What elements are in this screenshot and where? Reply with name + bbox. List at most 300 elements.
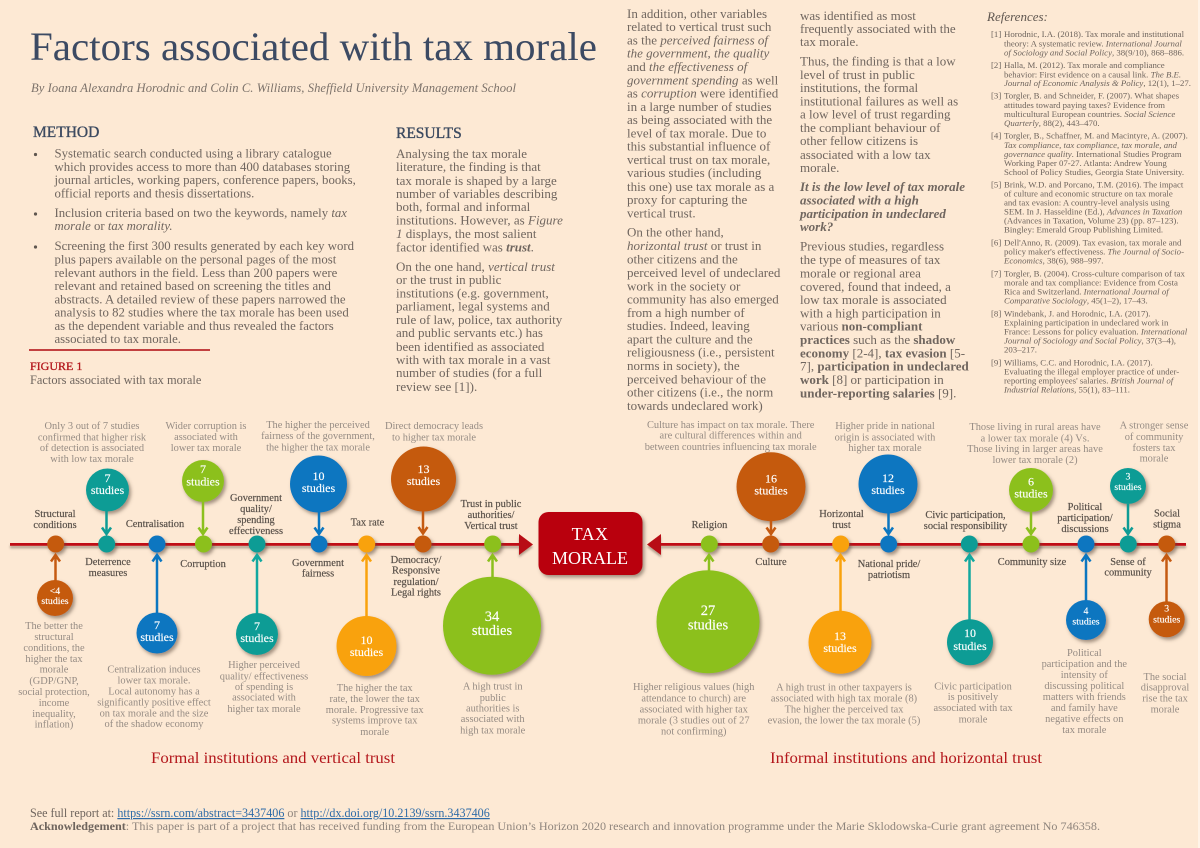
factor: structural conditions: conditions, the bbox=[23, 643, 85, 654]
reference numbers: [5] bbox=[991, 180, 1001, 190]
method text: relevant and retained based on screening the titles and bbox=[54, 279, 332, 293]
factor: national pride: National pride/ bbox=[858, 559, 920, 570]
results text column 3: frequently associated with the bbox=[800, 21, 956, 36]
factor: deterrence measures: studies bbox=[91, 483, 124, 497]
method text: Screening the first 300 results generated by each key word bbox=[54, 239, 355, 253]
factor: structural conditions: inequality, bbox=[32, 709, 76, 720]
method text: analysis to 82 studies where the tax morale has been used bbox=[54, 306, 349, 320]
factor: trust in public authorities: public bbox=[480, 693, 506, 704]
central box: tax morale: MORALE bbox=[552, 548, 628, 568]
results text column 2: related to vertical trust such bbox=[627, 19, 772, 34]
panel: results bbox=[396, 6, 972, 413]
results text column 3: under-reporting salaries [9]. bbox=[800, 386, 956, 400]
factor: trust in public authorities: A high trust in bbox=[463, 682, 523, 692]
figure caption bbox=[29, 349, 210, 387]
reference list: France: Lessons for policy evaluation. International bbox=[1004, 326, 1187, 336]
factor: corruption bbox=[166, 421, 246, 570]
results text column 2: On the other hand, bbox=[627, 224, 724, 240]
factor: horizontal trust: The higher the perceived tax bbox=[785, 704, 904, 716]
reference list: attitudes toward paying taxes? Evidence from bbox=[1004, 100, 1165, 110]
factor: deterrence measures: Deterrence bbox=[85, 557, 131, 568]
method text: plus papers available on the personal pages of the most bbox=[54, 252, 337, 266]
factor: structural conditions: inflation) bbox=[35, 720, 73, 730]
figure caption: FIGURE 1 bbox=[30, 359, 82, 373]
arrow: left timeline into tax morale bbox=[10, 534, 533, 555]
heading: results: RESULTS bbox=[396, 125, 462, 142]
results text column 3: 7], participation in undeclared bbox=[800, 358, 969, 374]
factor: democracy bbox=[385, 421, 483, 598]
factor: trust in public authorities: Vertical trust bbox=[464, 521, 518, 532]
factor: culture: Culture bbox=[755, 557, 787, 568]
reference list: Brink, W.D. and Porcano, T.M. (2016). The impact bbox=[1004, 180, 1184, 190]
results text column 3: a low level of trust regarding bbox=[800, 106, 951, 122]
reference numbers: [1] bbox=[991, 29, 1001, 39]
factor: social stigma: morale bbox=[1151, 704, 1180, 716]
factor: centralisation: 7 bbox=[154, 618, 160, 632]
reference list: Horodnic, I.A. (2018). Tax morale and institutional bbox=[1004, 29, 1185, 39]
factor: community size: Those living in larger areas have bbox=[967, 444, 1103, 455]
factor: corruption: studies bbox=[186, 474, 220, 488]
results text column 3: associated with a low tax bbox=[800, 147, 931, 162]
results text column 2: proxy for capturing the bbox=[627, 192, 747, 207]
results text column 3: morale or regional area bbox=[800, 266, 921, 280]
results text column 3: level of trust in public bbox=[800, 67, 915, 82]
results text column 1: 1 displays, the most salient bbox=[396, 226, 536, 241]
factor: centralisation bbox=[97, 519, 211, 730]
reference list: Torgler, B. (2004). Cross-culture comparison of tax bbox=[1004, 269, 1185, 279]
factor: democracy: studies bbox=[407, 474, 440, 488]
factor: deterrence measures: of detection is associated bbox=[40, 443, 145, 454]
factor: government fairness: the higher the tax morale bbox=[266, 442, 370, 454]
factor: social stigma: stigma bbox=[1153, 520, 1181, 530]
factor: horizontal trust: A high trust in other taxpayers is bbox=[776, 682, 912, 694]
results text column 2: perceived level of undeclared bbox=[627, 265, 781, 280]
results text column 3: the compliant behaviour of bbox=[800, 120, 941, 135]
results text column 3: practices such as the shadow bbox=[800, 332, 955, 347]
factor: religion: Religion bbox=[692, 520, 728, 531]
factor: centralisation: of the shadow economy bbox=[105, 719, 204, 730]
factor: horizontal trust: associated with high tax morale (8) bbox=[771, 694, 917, 704]
heading: method: METHOD bbox=[33, 124, 99, 141]
results text column 2: religiousness (i.e., persistent bbox=[627, 344, 775, 360]
reference list: Industrial Relations, 55(1), 83–111. bbox=[1004, 384, 1130, 394]
factor: political participation: discussions bbox=[1061, 524, 1109, 535]
results text column 2: In addition, other variables bbox=[627, 6, 767, 21]
section heading: formal institutions: Formal institutions and vertical trust bbox=[151, 750, 396, 767]
results text column 2: studies. Indeed, leaving bbox=[627, 318, 750, 333]
factor: political participation bbox=[1042, 502, 1127, 736]
factor: trust in public authorities: 34 bbox=[485, 609, 500, 625]
results text column 1: review see [1]). bbox=[396, 379, 477, 394]
reference list: Halla, M. (2012). Tax morale and compliance bbox=[1004, 60, 1165, 70]
results text column 2: horizontal trust or trust in bbox=[627, 238, 761, 253]
results text column 2: norms in society), the bbox=[627, 358, 740, 373]
factor: tax rate bbox=[326, 518, 424, 738]
factor: tax rate: 10 bbox=[360, 633, 372, 647]
factor: government quality: effectiveness bbox=[229, 526, 283, 537]
factor: community size: Community size bbox=[998, 557, 1067, 568]
heading: references: References: bbox=[986, 9, 1048, 24]
factor: deterrence measures: with low tax morale bbox=[50, 454, 134, 465]
factor: social stigma: 3 bbox=[1164, 604, 1169, 614]
factor: structural conditions: social protection, bbox=[18, 687, 90, 698]
reference numbers: [4] bbox=[991, 131, 1001, 141]
factor: government fairness bbox=[261, 420, 375, 580]
factor: civic participation: morale bbox=[959, 714, 988, 726]
results text column 2: from a high number of bbox=[627, 305, 745, 320]
factor: structural conditions: studies bbox=[41, 596, 69, 607]
factor: horizontal trust bbox=[768, 509, 920, 726]
results text column 2: vertical trust on tax morale, bbox=[627, 152, 770, 167]
results text column 2: other citizens and the bbox=[627, 252, 738, 266]
results text column 3: economy [2-4], tax evasion [5- bbox=[800, 346, 965, 360]
factor: tax rate: Tax rate bbox=[351, 518, 385, 528]
results text column 3: work? bbox=[800, 219, 834, 234]
reference list: Rica and Switzerland. International Journal of bbox=[1004, 287, 1169, 297]
results text column 2: level of tax morale. Due to bbox=[627, 126, 766, 140]
reference list: Comparative Sociology, 45(1–2), 17–43. bbox=[1004, 296, 1148, 306]
reference list: Windebank, J. and Horodnic, I.A. (2017). bbox=[1004, 308, 1150, 318]
factor: political participation: 4 bbox=[1084, 606, 1089, 617]
factor: centralisation: Centralization induces bbox=[107, 664, 201, 676]
results text column 2: in a large number of studies bbox=[627, 99, 772, 114]
factor: centralisation: Local autonomy has a bbox=[108, 686, 200, 698]
results text column 1: number of variables describing bbox=[396, 186, 558, 201]
reference list: reporting employees' salaries. British Journal of bbox=[1004, 375, 1173, 385]
reference list: SEM. In J. Hasseldine (Ed.), Advances in Taxation bbox=[1004, 207, 1182, 217]
method text: which provides access to more than 400 databases storing bbox=[54, 160, 351, 174]
factor: political participation: studies bbox=[1072, 616, 1100, 628]
central box: tax morale: TAX bbox=[572, 524, 608, 544]
results text column 3: associated with a high bbox=[800, 192, 919, 208]
factor: sense of community: 3 bbox=[1126, 472, 1131, 482]
factor: structural conditions: conditions bbox=[33, 520, 77, 531]
factor: national pride bbox=[835, 421, 936, 581]
factor: democracy: 13 bbox=[418, 462, 430, 476]
title: Factors associated with tax morale bbox=[30, 24, 597, 69]
factor: tax rate: studies bbox=[350, 645, 383, 659]
factor: sense of community: A stronger sense bbox=[1120, 420, 1189, 432]
reference list: and tax evasion: A country-level analysis using bbox=[1004, 198, 1170, 208]
factor: civic participation: is positively bbox=[948, 692, 999, 703]
factor: horizontal trust: Horizontal bbox=[819, 509, 864, 520]
results text column 2: the government, the quality bbox=[627, 46, 769, 60]
factor: trust in public authorities: Trust in public bbox=[461, 499, 522, 510]
factor: government quality: Government bbox=[230, 493, 282, 504]
results text column 2: as corruption were identified bbox=[627, 86, 778, 100]
factor: structural conditions: <4 bbox=[50, 586, 60, 597]
factor: community size: 6 bbox=[1028, 474, 1034, 488]
factor: corruption: 7 bbox=[200, 462, 206, 476]
factor: government quality: spending bbox=[237, 515, 275, 526]
factor: civic participation: associated with tax bbox=[933, 703, 1013, 714]
factor: deterrence measures bbox=[38, 421, 147, 579]
footer: report links and acknowledgement bbox=[30, 806, 1100, 833]
factor: culture: Culture has impact on tax morale. There bbox=[647, 420, 815, 431]
factor: horizontal trust: trust bbox=[832, 520, 851, 531]
reference list: morale and tax compliance: Evidence from Costa bbox=[1004, 278, 1178, 288]
reference list: Journal of Sociology and Social Policy, 37(3–4), bbox=[1004, 335, 1176, 345]
factor: democracy: Responsive bbox=[392, 566, 440, 576]
results text column 1: both, formal and informal bbox=[396, 199, 531, 214]
factor: political participation: discussing political bbox=[1044, 681, 1124, 692]
results text column 2: this one) use tax morale as a bbox=[627, 179, 775, 194]
results text column 2: this substantial influence of bbox=[627, 138, 771, 154]
factor: centralisation: on tax morale and the size bbox=[100, 708, 209, 720]
factor: trust in public authorities: authorities/ bbox=[468, 510, 514, 521]
factor: structural conditions: Structural bbox=[35, 509, 76, 520]
factor: government fairness: studies bbox=[302, 481, 335, 495]
factor: political participation: negative effects on bbox=[1045, 714, 1124, 725]
factor: trust in public authorities: associated with bbox=[461, 714, 525, 725]
reference list: behavior: First evidence on a causal link. The B.E. bbox=[1004, 69, 1181, 79]
figure caption: Factors associated with tax morale bbox=[30, 373, 202, 387]
method text: associated to tax morale. bbox=[54, 332, 181, 346]
method text: as the dependent variable and thus revealed the factors bbox=[54, 319, 334, 333]
factor: centralisation: lower tax morale. bbox=[118, 676, 190, 686]
results text column 2: and the effectiveness of bbox=[627, 59, 747, 74]
factor: religion: Higher religious values (high bbox=[633, 682, 755, 693]
reference list: theory: A systematic review. International Journal bbox=[1004, 38, 1182, 48]
factor: social stigma: The social bbox=[1144, 672, 1187, 683]
reference list: (Advances in Taxation, Volume 23) (pp. 87–123). bbox=[1004, 216, 1179, 226]
factor: trust in public authorities: high tax morale bbox=[460, 726, 526, 736]
factor: social stigma: disapproval bbox=[1141, 682, 1189, 694]
factor: government fairness: The higher the perceived bbox=[266, 420, 371, 431]
reference numbers: [8] bbox=[991, 308, 1001, 318]
factor: horizontal trust: 13 bbox=[834, 629, 846, 643]
factor: religion: attendance to church) are bbox=[641, 694, 746, 704]
reference list: School of Policy Studies, Georgia State University. bbox=[1004, 167, 1184, 177]
results text column 3: participation in undeclared bbox=[799, 206, 946, 221]
results text column 1: tax morale is shaped by a large bbox=[396, 173, 557, 188]
factor: deterrence measures: measures bbox=[89, 568, 127, 579]
results text column 3: It is the low level of tax morale bbox=[799, 179, 965, 194]
factor: government quality: of spending is bbox=[235, 682, 293, 693]
results text column 3: tax morale. bbox=[800, 34, 858, 49]
factor: centralisation: Centralisation bbox=[126, 519, 185, 530]
factor: government quality: higher tax morale bbox=[227, 704, 301, 715]
factor: social stigma: studies bbox=[1153, 614, 1180, 626]
factor: deterrence measures: confirmed that higher risk bbox=[38, 432, 147, 444]
results text column 1: Analysing the tax morale bbox=[396, 146, 527, 161]
factor: government fairness: 10 bbox=[312, 469, 324, 483]
factor: structural conditions: morale bbox=[40, 664, 69, 676]
factor: social stigma bbox=[1141, 508, 1189, 716]
factor: religion: studies bbox=[688, 618, 728, 634]
results text column 3: various non-compliant bbox=[800, 318, 922, 334]
reference list: policy maker's effectiveness. The Journal of Socio- bbox=[1004, 247, 1184, 257]
factor: religion: associated with higher tax bbox=[640, 704, 749, 716]
results text column 2: apart the culture and the bbox=[627, 332, 753, 346]
factor: government fairness: fairness bbox=[302, 568, 334, 580]
reference numbers: [2] bbox=[991, 60, 1001, 70]
results text column 3: was identified as most bbox=[800, 8, 916, 23]
reference list: Working Paper 07-27. Atlanta: Andrew Young bbox=[1004, 158, 1167, 168]
results text column 3: covered, found that indeed, a bbox=[800, 279, 951, 294]
factor: corruption: Wider corruption is bbox=[166, 421, 246, 432]
factor: civic participation: Civic participation bbox=[934, 682, 1013, 692]
factor: government fairness: fairness of the government, bbox=[261, 431, 375, 442]
factor: political participation: Political bbox=[1067, 648, 1102, 659]
reference list: Economics, 38(6), 988–997. bbox=[1004, 256, 1103, 266]
reference list: governance quality. International Studies Program bbox=[1004, 149, 1182, 159]
results text column 3: the type of measures of tax bbox=[800, 252, 941, 267]
factor: political participation: Political bbox=[1068, 502, 1102, 513]
factor: national pride: Higher pride in national bbox=[835, 421, 935, 432]
reference list: of Sociology and Social Policy, 38(9/10), 868–886. bbox=[1004, 47, 1184, 57]
factor: sense of community: studies bbox=[1114, 482, 1142, 493]
factor: community size: a lower tax morale (4) Vs. bbox=[981, 434, 1089, 444]
factor: culture: are cultural differences within and bbox=[660, 430, 803, 442]
reference numbers: [3] bbox=[991, 91, 1001, 101]
factor: government quality: associated with bbox=[232, 692, 297, 704]
factor: government fairness: Government bbox=[292, 558, 344, 569]
factor: sense of community: fosters tax bbox=[1132, 443, 1176, 454]
reference list: Williams, C.C. and Horodnic, I.A. (2017). bbox=[1004, 357, 1153, 367]
factor: sense of community: of community bbox=[1125, 432, 1184, 443]
results text column 1: institutions (e.g. government, bbox=[396, 286, 549, 300]
factor: social stigma: Social bbox=[1154, 508, 1180, 520]
results text column 2: community has also emerged bbox=[627, 292, 779, 306]
arrow: right timeline into tax morale bbox=[647, 534, 1186, 555]
panel: references bbox=[986, 9, 1193, 394]
factor: national pride: patriotism bbox=[868, 570, 910, 581]
factor: structural conditions: higher the tax bbox=[25, 654, 83, 665]
results text column 2: towards undeclared work) bbox=[627, 398, 763, 413]
results text column 1: institutions. However, as Figure bbox=[396, 212, 563, 228]
factor: community size bbox=[967, 422, 1103, 568]
results text column 3: morale. bbox=[800, 160, 839, 175]
factor: religion bbox=[633, 520, 760, 738]
factor: political participation: participation/ bbox=[1057, 513, 1113, 524]
section heading: informal institutions: Informal institutions and horizontal trust bbox=[770, 750, 1043, 767]
results text column 1: factor identified was trust. bbox=[396, 240, 534, 254]
factor: religion: 27 bbox=[701, 603, 715, 619]
factor: political participation: and family have bbox=[1051, 703, 1118, 714]
factor: corruption: Corruption bbox=[180, 559, 227, 570]
reference list: Bingley: Emerald Group Publishing Limited. bbox=[1004, 225, 1163, 235]
factor: political participation: matters with friends bbox=[1043, 692, 1126, 703]
reference list: Evaluating the illegal employer practice of under- bbox=[1004, 366, 1179, 376]
factor: culture: studies bbox=[754, 484, 788, 498]
factor: government quality: quality/ bbox=[240, 504, 272, 515]
factor: democracy: regulation/ bbox=[393, 577, 439, 588]
results text column 3: low tax morale is associated bbox=[800, 292, 947, 307]
factor: trust in public authorities bbox=[443, 499, 541, 736]
factor: sense of community: morale bbox=[1140, 454, 1169, 464]
results text column 3: work [8] or participation in bbox=[800, 372, 944, 387]
method text: Systematic search conducted using a library catalogue bbox=[54, 146, 332, 160]
results text column 3: institutional failures as well as bbox=[800, 94, 958, 108]
factor: religion: morale (3 studies out of 27 bbox=[638, 716, 750, 726]
method text: Inclusion criteria based on two the keywords, namely tax bbox=[54, 206, 347, 220]
factor: religion: not confirming) bbox=[661, 726, 726, 738]
factor: culture: between countries influencing tax morale bbox=[645, 442, 817, 453]
factor: tax rate: The higher the tax bbox=[337, 683, 413, 694]
factor: tax rate: rate, the lower the tax bbox=[330, 694, 421, 705]
factor: horizontal trust: evasion, the lower the tax morale (5) bbox=[768, 716, 920, 726]
factor: national pride: higher tax morale bbox=[848, 443, 922, 454]
method text: morale or tax morality. bbox=[54, 219, 173, 233]
factor: culture bbox=[645, 420, 817, 568]
results text column 1: parliament, legal systems and bbox=[396, 298, 550, 314]
factor: deterrence measures: Only 3 out of 7 studies bbox=[45, 421, 139, 432]
reference list: Explaining participation in undeclared work in bbox=[1004, 317, 1169, 327]
results text column 3: institutions, the formal bbox=[800, 80, 918, 95]
factor: government quality: studies bbox=[240, 631, 274, 645]
reference numbers: [7] bbox=[991, 269, 1001, 279]
results text column 3: Previous studies, regardless bbox=[800, 238, 944, 254]
factor: centralisation: significantly positive effect bbox=[97, 698, 211, 708]
factor: democracy: Democracy/ bbox=[391, 555, 441, 566]
method text: relevant authors in the field. Less than 200 papers were bbox=[54, 266, 338, 280]
method text: journal articles, working papers, conference papers, books, bbox=[54, 173, 356, 187]
factor: trust in public authorities: studies bbox=[472, 623, 512, 639]
factor: social stigma: rise the tax bbox=[1142, 694, 1189, 704]
results text column 2: various studies (including bbox=[627, 165, 762, 180]
method text: abstracts. A detailed review of these papers narrowed the bbox=[54, 292, 346, 306]
factor: sense of community: Sense of bbox=[1110, 557, 1146, 568]
factor: political participation: participation and the bbox=[1042, 659, 1127, 670]
factor: structural conditions: The better the bbox=[25, 621, 83, 632]
factor: tax rate: systems improve tax bbox=[332, 716, 418, 726]
method text: official reports and thesis dissertations. bbox=[54, 186, 254, 200]
reference numbers: [6] bbox=[991, 238, 1001, 248]
reference numbers: [9] bbox=[991, 357, 1001, 367]
reference list: Quarterly, 88(2), 443–470. bbox=[1004, 118, 1100, 128]
factor: tax rate: morale. Progressive tax bbox=[326, 705, 424, 716]
factor: community size: studies bbox=[1014, 486, 1048, 500]
results text column 3: with a high participation in bbox=[800, 306, 941, 320]
factor: trust in public authorities: authorities is bbox=[466, 704, 519, 714]
factor: centralisation: studies bbox=[140, 630, 174, 644]
factor: sense of community: community bbox=[1104, 568, 1152, 578]
results text column 1: with with tax morale in a vast bbox=[396, 352, 551, 367]
results text column 1: rule of law, police, tax authority bbox=[396, 312, 563, 327]
footer: report links and acknowledgement: Acknowledgement : This paper is part of a project that has received funding from the European Union’s Horizon 2020 research and innovation programme under the Marie Sklodowska-Curie grant agreement No 746358. bbox=[30, 821, 1100, 833]
panel: method bbox=[33, 124, 359, 346]
factor: democracy: Legal rights bbox=[391, 588, 441, 598]
factor: community size: lower tax morale (2) bbox=[992, 455, 1078, 466]
factor: national pride: 12 bbox=[882, 471, 894, 485]
reference list: Journal of Economic Analysis & Policy, 12(1), 1–27. bbox=[1004, 78, 1191, 88]
factor: structural conditions: structural bbox=[34, 632, 74, 643]
results text column 1: literature, the finding is that bbox=[396, 159, 541, 174]
reference list: Torgler, B. and Schneider, F. (2007). What shapes bbox=[1004, 91, 1180, 101]
results text column 3: Thus, the finding is that a low bbox=[800, 54, 956, 68]
reference list: Torgler, B., Schaffner, M. and Macintyre, A. (2007). bbox=[1004, 131, 1188, 141]
factor: political participation: tax morale bbox=[1062, 725, 1107, 736]
factor: corruption: lower tax morale bbox=[171, 443, 242, 454]
results text column 1: or the trust in public bbox=[396, 272, 502, 287]
authors subtitle: By Ioana Alexandra Horodnic and Colin C. Williams, Sheffield University Management School bbox=[31, 81, 516, 95]
factor: government quality: quality/ effectiveness bbox=[220, 672, 308, 682]
results text column 2: perceived behaviour of the bbox=[627, 372, 766, 386]
reference list: Dell'Anno, R. (2009). Tax evasion, tax morale and bbox=[1004, 238, 1182, 248]
results text column 2: vertical trust. bbox=[627, 206, 696, 220]
factor: government quality: Higher perceived bbox=[228, 660, 301, 671]
results text column 2: government spending as well bbox=[627, 72, 778, 88]
factor: sense of community bbox=[1104, 420, 1189, 578]
results text column 1: and public servants etc.) has bbox=[396, 325, 543, 340]
results text column 2: other citizens (i.e., the norm bbox=[627, 384, 773, 400]
reference list: Tax compliance, tax compliance, tax morale, and bbox=[1004, 140, 1177, 150]
factor: government quality bbox=[220, 493, 308, 715]
results text column 2: as being associated with the bbox=[627, 112, 772, 127]
factor: corruption: associated with bbox=[174, 432, 239, 443]
factor: horizontal trust: studies bbox=[823, 641, 857, 655]
